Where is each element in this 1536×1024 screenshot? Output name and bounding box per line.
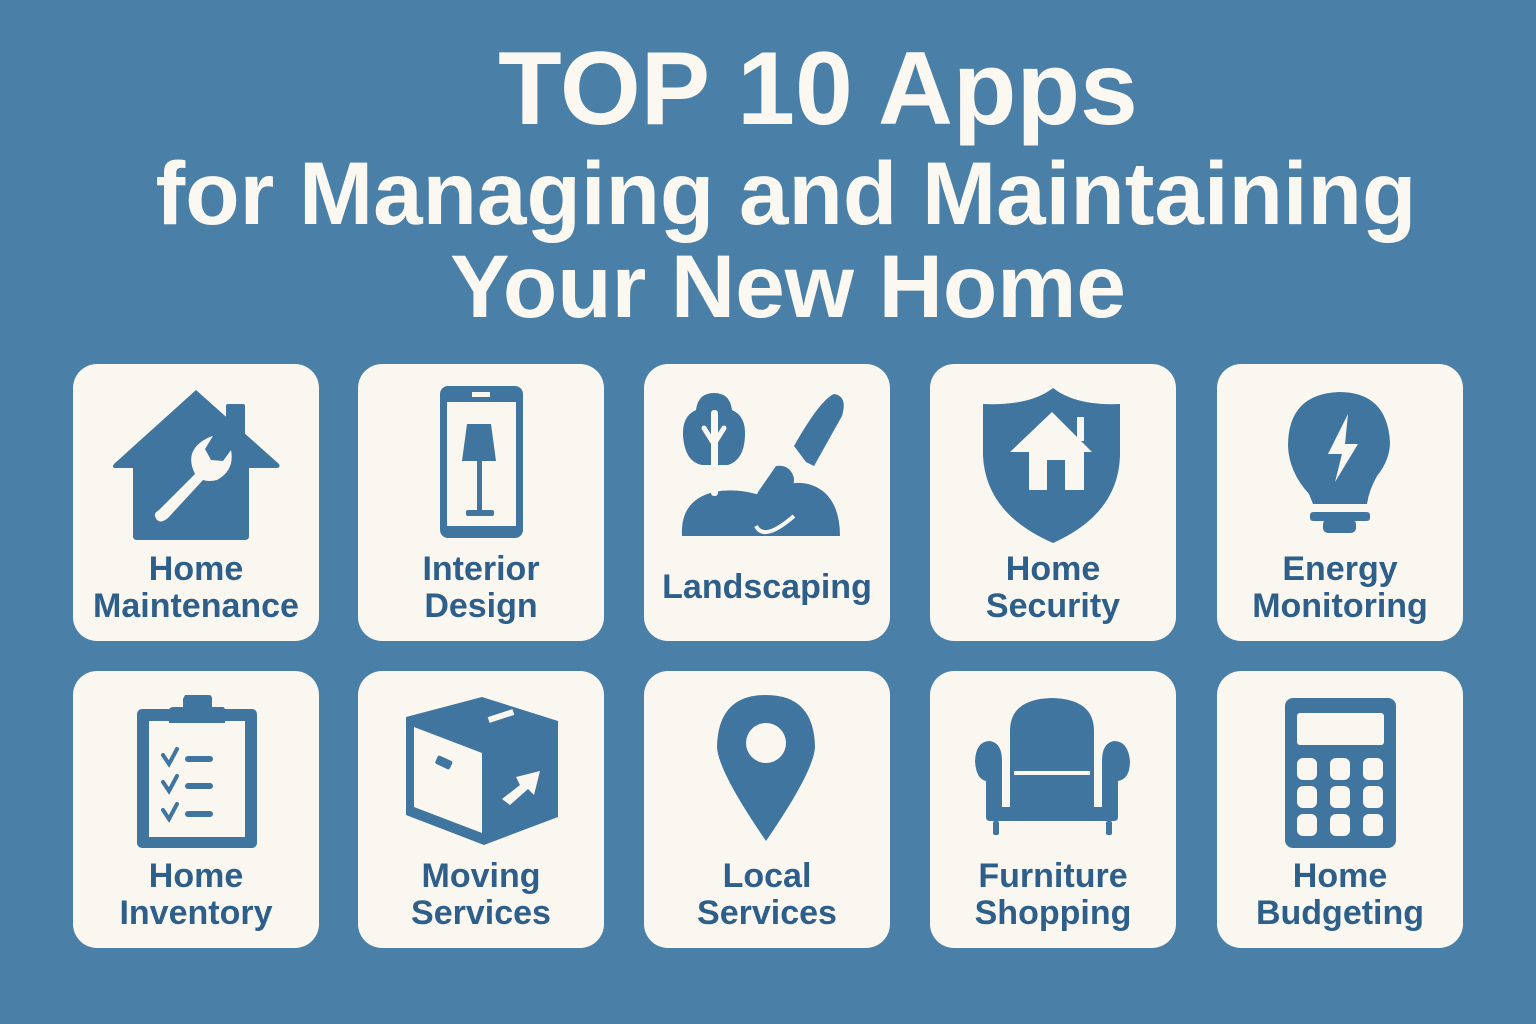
label: Landscaping [662, 568, 872, 606]
label: Shopping [975, 894, 1131, 932]
icon: tree and trowel [682, 393, 844, 536]
label: Budgeting [1256, 894, 1424, 932]
icon: house with wrench [112, 390, 280, 540]
label [119, 857, 273, 932]
label: Home [149, 857, 243, 895]
title: TOP 10 Apps [498, 31, 1138, 147]
icon: clipboard checklist [137, 695, 257, 848]
label [411, 857, 551, 932]
label: Furniture [978, 857, 1128, 895]
label [975, 857, 1131, 932]
title: for Managing and Maintaining [156, 143, 1416, 243]
panel: interior design [358, 364, 604, 641]
label [1252, 550, 1428, 625]
panel: home inventory [73, 671, 319, 948]
panel: energy monitoring [1217, 364, 1463, 641]
icon: box with arrow [406, 697, 558, 845]
label: Maintenance [93, 587, 299, 625]
label: Moving [422, 857, 540, 895]
label: Home [149, 550, 243, 588]
label: Home [1293, 857, 1387, 895]
panel: local services [644, 671, 890, 948]
label: Local [723, 857, 811, 895]
label: Monitoring [1252, 587, 1428, 625]
panel: moving services [358, 671, 604, 948]
label [422, 550, 540, 625]
title: Your New Home [450, 236, 1126, 336]
title [156, 31, 1416, 336]
label: Security [986, 587, 1120, 625]
icon: phone with lamp [440, 386, 523, 538]
icon: light bulb with bolt [1288, 392, 1390, 533]
panel: home maintenance [73, 364, 319, 641]
label: Inventory [119, 894, 273, 932]
label: Design [424, 587, 538, 625]
label [986, 550, 1120, 625]
label: Interior [422, 550, 540, 588]
label: Services [697, 894, 837, 932]
label [1256, 857, 1424, 932]
icon: calculator [1285, 698, 1396, 848]
label [697, 857, 837, 932]
label [93, 550, 299, 625]
panel: home security [930, 364, 1176, 641]
label: Energy [1282, 550, 1398, 588]
icon: shield with house [983, 388, 1120, 543]
panel: home budgeting [1217, 671, 1463, 948]
label: Services [411, 894, 551, 932]
panel: furniture shopping [930, 671, 1176, 948]
icon: armchair [975, 698, 1130, 835]
icon: map pin [717, 695, 815, 841]
label: Home [1006, 550, 1100, 588]
panel: landscaping [644, 364, 890, 641]
